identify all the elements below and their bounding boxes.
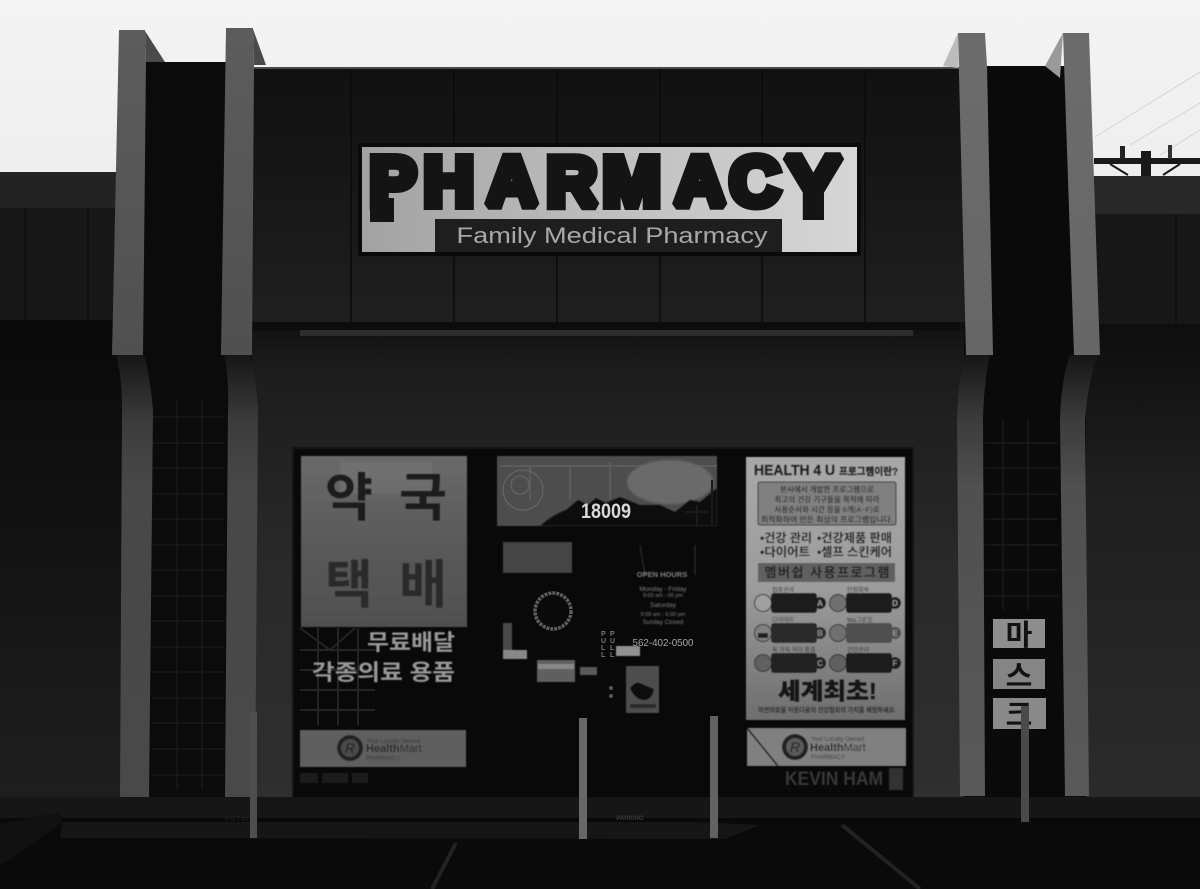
bollard 4 (1021, 706, 1029, 822)
health mart strip right: PHARMACY (811, 755, 845, 761)
open hours: 9:00 am - 00 pm (643, 593, 683, 599)
health mart strip left: Your Locally Owned (367, 739, 420, 745)
sign subtitle band: Family Medical Pharmacy (456, 223, 768, 248)
program A: A (817, 599, 823, 608)
world first slogan: 세계최초! (778, 678, 877, 704)
poster services list: •건강 관리 (760, 531, 812, 545)
poster services list: •셀프 스킨케어 (817, 545, 892, 559)
kevin ham sign: KEVIN HAM (785, 769, 883, 790)
health mart strip left: PHARMACY (366, 756, 400, 762)
program D: 안정회복 (847, 586, 870, 594)
poster services list: •다이어트 (760, 544, 810, 559)
pull labels: P (601, 631, 606, 638)
health mart strip right: HealthMart (810, 742, 866, 754)
program B (754, 616, 826, 643)
membership banner: 멤버쉽 사용프로그램 (764, 565, 890, 580)
window frame (293, 448, 913, 798)
mask sign letter one: 마 (1006, 619, 1033, 652)
program B: B (817, 629, 823, 638)
program A: 집중관리 (772, 586, 794, 594)
address number: 18009 (581, 500, 631, 523)
lower storefront wall (252, 322, 964, 800)
program E (830, 617, 901, 643)
upper fascia panel with seams (252, 67, 968, 336)
recessed bay left (143, 62, 228, 802)
sign heading: PHARMAC (370, 142, 780, 220)
open hours (637, 545, 695, 626)
pull labels: L (601, 645, 606, 652)
poster services list (760, 530, 892, 559)
program E: Wa그로잉 (847, 617, 872, 624)
program D: D (892, 599, 898, 608)
health 4 u poster (746, 457, 905, 720)
door stickers left (503, 623, 640, 682)
pull labels: L (610, 652, 615, 659)
poster intro box: 최고의 건강 기구들을 목적에 따라 (775, 494, 880, 504)
reflected grid under poster (300, 628, 375, 725)
pull labels: L (601, 652, 606, 659)
program C: 목 가득 허리 통증 (772, 646, 816, 654)
power lines and utility crossarm (1094, 72, 1200, 176)
round door seal (535, 593, 571, 629)
recessed bay right (968, 66, 1086, 802)
sidewalk and curb: PARKING (616, 816, 644, 822)
pull labels: L (610, 645, 615, 652)
poster heading: HEALTH 4 U 프로그램이란? (754, 463, 898, 479)
korean poster subtitle: 택 배 (325, 557, 447, 615)
program F: F (893, 659, 898, 668)
free delivery text (312, 630, 455, 685)
sidewalk and curb: P O T A N (225, 817, 251, 823)
sign subtitle band (435, 219, 782, 252)
poster services list: •건강제품 판매 (817, 530, 892, 545)
pillar 4 (1045, 33, 1100, 796)
program F: 건강관리 (847, 646, 869, 654)
pillar 2 (221, 28, 266, 798)
open hours: 9:00 am - 6:00 pm (641, 612, 686, 618)
program C (754, 646, 826, 673)
open hours: Saturday (650, 602, 677, 609)
free delivery text: 각종의료 용품 (312, 660, 455, 685)
health mart strip right: Your Locally Owned (811, 737, 864, 743)
poster intro box (758, 482, 896, 525)
program C: C (817, 659, 823, 668)
mask sign letter two: 스 (1006, 661, 1032, 693)
program A (754, 586, 826, 613)
pillar 1 (112, 30, 165, 798)
health mart strip left: R (345, 740, 355, 756)
mask sign letter three: 크 (1006, 700, 1032, 732)
pull labels: U (610, 638, 615, 645)
program E: E (892, 629, 898, 638)
pull labels: P (610, 631, 615, 638)
mask sign (993, 619, 1046, 732)
bollard 3 (710, 716, 718, 838)
pull labels (601, 631, 615, 659)
health mart strip right: R (790, 739, 800, 755)
open hours: Monday - Friday (640, 586, 687, 593)
pillar 3 (943, 33, 993, 796)
door upper glass (497, 456, 717, 526)
parking lines (432, 825, 920, 889)
program B: 다이어트 (772, 616, 795, 624)
health mart strip left: HealthMart (366, 743, 422, 755)
small reflected panes (300, 773, 368, 783)
poster intro box: 사용순서와 시간 등을 6개(A~F)로 (774, 504, 880, 514)
program F (830, 646, 901, 673)
sidewalk and curb (0, 797, 1200, 889)
poster footer: 자연의료을 이용다움의 건강협회의 가치를 체험하세요. (758, 705, 896, 714)
pull labels: U (601, 638, 606, 645)
door reflection pane (503, 542, 572, 573)
bollard 1 (250, 712, 257, 838)
face mask notice (626, 666, 659, 713)
bollard 2 (579, 718, 587, 839)
free delivery text: 무료배달 (367, 630, 455, 655)
right neighbouring roofline (1085, 176, 1200, 800)
extended P stem (370, 198, 394, 222)
health mart strip left (300, 730, 466, 767)
phone number: 562-402-0500 (632, 637, 694, 649)
poster intro box: 본사에서 개발한 프로그램으로 (780, 484, 874, 494)
open hours: Sunday Closed (643, 620, 683, 626)
left neighbouring roofline (0, 172, 122, 800)
korean poster title: 약 국 (325, 470, 447, 528)
program D (830, 586, 901, 613)
sign heading: Y (785, 140, 842, 234)
pharmacy sign (358, 140, 861, 256)
door handles (609, 686, 613, 698)
health mart strip right (747, 728, 906, 766)
left window poster (301, 456, 467, 627)
sky (0, 0, 1200, 180)
poster intro box: 최적화하여 만든 최상의 프로그램입니다. (761, 514, 893, 524)
open hours: OPEN HOURS (637, 570, 687, 579)
